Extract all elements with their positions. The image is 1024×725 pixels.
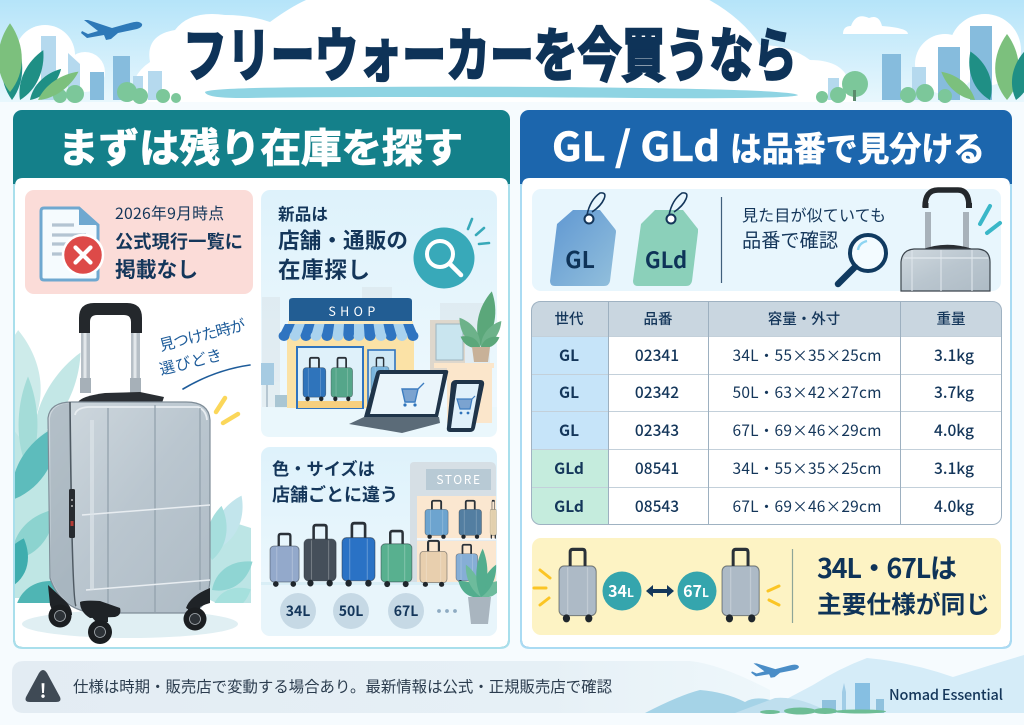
table header: 品番 <box>644 308 673 329</box>
footer mountains <box>645 655 1024 714</box>
table header <box>554 308 966 329</box>
table header: 世代 <box>554 308 584 329</box>
callout: not listed: 公式現行一覧に <box>115 228 243 254</box>
icon: document with x <box>41 208 103 280</box>
callout: not listed: 掲載なし <box>115 253 198 283</box>
icon: footer airplane <box>751 663 799 678</box>
table <box>531 301 1002 525</box>
callout: same specs <box>532 538 1001 635</box>
icon: warning <box>26 670 60 702</box>
table rows: 50L・63×42×27cm <box>732 381 882 403</box>
main suitcase <box>48 303 210 644</box>
callout: same specs: 主要仕様が同じ <box>817 585 990 621</box>
panel: new items shop: 店舗・通販の <box>278 224 408 255</box>
footer: Nomad Essential <box>889 684 1003 705</box>
right panel heading <box>552 115 985 173</box>
icon: tag GLd <box>633 193 698 286</box>
icon: tag GL <box>550 193 616 286</box>
table rows: 02343 <box>635 419 679 441</box>
table rows: 08541 <box>635 457 679 479</box>
callout: same specs: 34L <box>608 578 634 602</box>
table header: 容量・外寸 <box>768 308 840 329</box>
panel: store stock: 色・サイズは <box>272 455 375 480</box>
table rows: 3.1kg <box>934 457 974 479</box>
size chips <box>280 593 457 629</box>
icon: tag GL: GL <box>565 241 595 275</box>
callout: not listed <box>25 190 253 294</box>
panel: new items shop: 在庫探し <box>278 253 370 285</box>
table rows: GLd <box>554 495 584 517</box>
size chips: 50L <box>339 601 363 621</box>
footer: 仕様は時期・販売店で変動する場合あり。最新情報は公式・正規販売店で確認 <box>73 675 612 697</box>
table rows: 67L・69×46×29cm <box>732 495 882 517</box>
suitcase row <box>270 523 447 587</box>
footer: ! <box>39 677 47 704</box>
table rows: 08543 <box>635 495 679 517</box>
size chips: 34L <box>286 601 310 621</box>
handwritten note <box>157 313 250 389</box>
panel: store stock <box>261 447 507 636</box>
plant and desk <box>430 290 506 423</box>
leaves decoration <box>15 330 252 603</box>
plant <box>458 548 497 624</box>
icon: phone <box>447 380 484 432</box>
icon: suitcase <box>901 190 1000 291</box>
handwritten note: 見つけた時が <box>157 313 248 356</box>
icon: yellow sparks <box>216 398 238 423</box>
right city skyline <box>816 26 1024 105</box>
floor shadow <box>22 610 238 638</box>
panel: right <box>520 110 1012 648</box>
table rows: 3.1kg <box>934 344 974 366</box>
table rows: 34L・55×35×25cm <box>732 457 882 479</box>
panel: store stock: 店舗ごとに違う <box>272 481 398 507</box>
panel: new items shop <box>261 190 506 437</box>
panel: new items shop: 新品は <box>278 201 328 225</box>
icon: search <box>414 219 489 288</box>
panel: tags <box>532 189 1001 291</box>
callout: same specs: 34L・67Lは <box>817 547 957 586</box>
left panel heading: まずは残り在庫を探す <box>58 116 463 174</box>
icon: magnifier <box>838 235 886 284</box>
title underline <box>205 87 798 98</box>
icon: tag GLd: GLd <box>645 243 687 275</box>
right panel heading: は品番で見分ける <box>730 122 985 171</box>
arrow <box>646 585 674 597</box>
panel: tags: 品番で確認 <box>742 225 838 253</box>
table rows: 34L・55×35×25cm <box>732 344 882 366</box>
table rows: GLd <box>554 457 584 479</box>
table rows: 3.7kg <box>934 381 974 403</box>
table rows: 4.0kg <box>934 495 974 517</box>
panel: tags: 見た目が似ていても <box>742 202 886 226</box>
table rows: GL <box>559 381 579 403</box>
icon: airplane <box>81 20 142 40</box>
store backdrop: STORE <box>436 471 482 488</box>
table rows: 02342 <box>635 381 679 403</box>
icon: laptop <box>349 370 448 433</box>
table rows: 4.0kg <box>934 419 974 441</box>
table rows: GL <box>559 344 579 366</box>
handwritten note: 選びどき <box>157 343 224 380</box>
table rows <box>554 344 974 517</box>
footer <box>12 655 1024 714</box>
right panel heading: GL / GLd <box>552 115 720 173</box>
wheels <box>48 585 210 644</box>
table rows: 67L・69×46×29cm <box>732 419 882 441</box>
left city skyline <box>0 23 181 105</box>
table header: 重量 <box>936 308 966 329</box>
table rows: GL <box>559 419 579 441</box>
shop: SHOP <box>328 301 380 320</box>
callout: same specs: 67L <box>683 578 709 602</box>
store backdrop <box>410 462 497 587</box>
size chips: 67L <box>394 601 418 621</box>
table rows: 02341 <box>635 344 679 366</box>
background buildings <box>262 287 490 407</box>
callout: not listed: 2026年9月時点 <box>115 201 224 224</box>
title: フリーウォーカーを今買うなら <box>183 9 797 93</box>
header background <box>0 0 1024 102</box>
shop <box>279 298 418 408</box>
